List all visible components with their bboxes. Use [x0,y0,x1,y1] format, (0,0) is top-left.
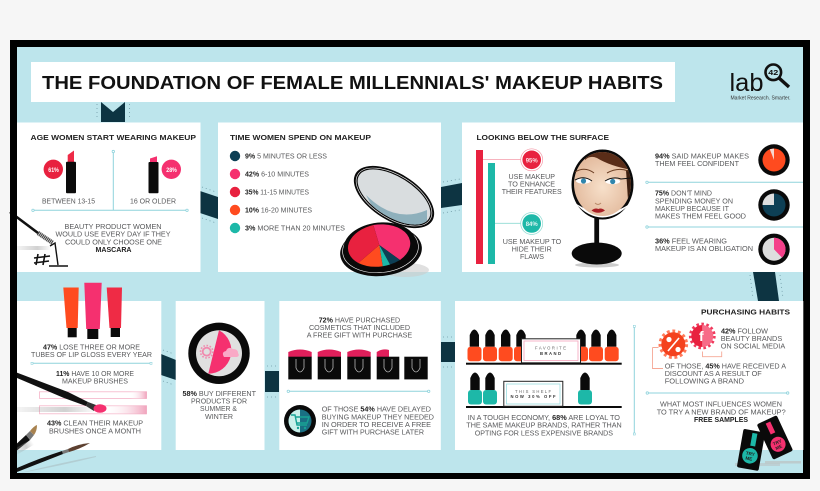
icon: try me sample cards [735,415,801,471]
icon: large pink makeup brush [10,370,106,413]
text block: free samples [657,400,786,424]
badge: 95% [521,149,543,171]
text block: social media: ON SOCIAL MEDIA [721,342,786,351]
badge: 84% [521,212,543,234]
stat: 75% feel good: SPENDING MONEY ON [655,196,733,205]
stat: 94% confident: THEM FEEL CONFIDENT [655,159,739,168]
sign: favorite brand: FAVORITE [535,346,566,350]
badge: 95%: 95% [526,158,538,164]
bar: 95% [476,150,522,264]
card: teal try me: ME [745,456,753,462]
icon: lipstick 61%: 61% [48,167,59,174]
text block: mascara: MASCARA [96,245,132,254]
heading: purchasing habits: PURCHASING HABITS [701,308,790,316]
connector: time to surface panel [441,179,462,213]
panel: seasons [176,301,264,450]
text block: social media: BEAUTY BRANDS [721,334,782,343]
text block: loyalty: IN A TOUGH ECONOMY, 68% ARE LOYAL TO [468,413,620,422]
text block: social media [721,326,786,351]
text block: hide flaws: HIDE THEIR [512,245,552,254]
icon: eyeshadow circle [188,323,250,384]
card: pink try me: ME [775,444,783,451]
text block: enhance: THEIR FEATURES [502,187,562,196]
icon: small tan brush [10,425,37,456]
legend: 9%: 9% 5 MINUTES OR LESS [245,152,327,160]
text block: delayed buying: OF THOSE 54% HAVE DELAYED [322,405,431,414]
title banner [31,62,675,102]
stat: 75% feel good: 75% DON'T MIND [655,189,712,198]
text block: loyalty [466,413,622,437]
icon: mirror with face [572,150,634,268]
text block: seasons: 58% BUY DIFFERENT [182,389,256,398]
connector: surface to purchasing panel [750,272,783,301]
stat: 94% confident: 94% SAID MAKEUP MAKES [655,152,749,161]
heading: age: AGE WOMEN START WEARING MAKEUP [30,133,196,142]
icon: lipstick 28%: 28% [166,167,177,174]
text block: mascara [56,222,170,254]
text block: mascara: COULD ONLY CHOOSE ONE [65,237,162,246]
text block: free samples: TO TRY A NEW BRAND OF MAKEUP? [657,407,786,416]
text block: cleaning: 43% CLEAN THEIR MAKEUP [47,419,143,428]
text block: hide flaws [503,237,561,261]
connector: seasons to gifts panel [265,366,279,397]
text block: enhance: TO ENHANCE [508,180,555,189]
icon: shopping bags [288,349,428,379]
connector: title to age panel [97,102,130,122]
legend: 10% [230,205,312,215]
panel: brands and purchasing habits [455,301,803,450]
icon: orange polish shelf [466,330,622,365]
legend: 3%: 3% MORE THAN 20 MINUTES [245,224,345,232]
text block: loyalty: THE SAME MAKEUP BRANDS, RATHER THAN [466,421,622,430]
panel: time women spend on makeup [218,122,441,272]
text block: enhance: USE MAKEUP [508,172,555,181]
icon: compact pie chart [340,166,434,277]
panel: age women start wearing makeup [17,122,200,272]
stat: 36% obligation: MAKEUP IS AN OBLIGATION [655,244,753,253]
text block: enhance [502,172,562,196]
legend: 42% [230,169,309,179]
text block: discount: OF THOSE, 45% HAVE RECEIVED A [665,361,787,370]
icon: shopping cart circle [284,405,316,437]
legend: 35%: 35% 11-15 MINUTES [245,188,309,196]
text block: hide flaws: FLAWS [520,252,544,261]
sign: favorite brand: BRAND [540,351,561,356]
panel: looking below the surface [462,122,803,272]
connector: gifts to brands panel [441,337,455,367]
legend: 35% [230,187,309,197]
divider: vertical [633,325,635,435]
text block: social media: 42% FOLLOW [721,326,769,335]
connector: lip gloss to seasons panel [161,350,176,385]
card: pink try me [757,415,793,460]
icon: lab42 logo: 42 [768,68,778,77]
divider: lip gloss [31,362,152,364]
text block: seasons: SUMMER & [200,404,237,413]
stat: 75% feel good: MAKES THEM FEEL GOOD [655,212,746,221]
text block: seasons: WINTER [205,412,233,421]
text block: discount: FOLLOWING A BRAND [665,377,744,386]
heading: time: TIME WOMEN SPEND ON MAKEUP [230,133,371,142]
text block: loyalty: OPTING FOR LESS EXPENSIVE BRANDS [475,428,613,437]
icon: flat dark brush [10,443,96,475]
icon: lipstick 28% [148,156,181,193]
text block: discount: DISCOUNT AS A RESULT OF [665,369,762,378]
text block: delayed buying: GIFT WITH PURCHASE LATER [322,428,424,437]
stat: 75% feel good [655,189,790,221]
sign: this shelf now 30% off: NOW 30% OFF [510,394,556,399]
legend: 10%: 10% 16-20 MINUTES [245,206,312,214]
text block: cleaning: BRUSHES ONCE A MONTH [49,426,141,435]
sign: this shelf now 30% off [504,381,563,406]
stat: 36% obligation: 36% FEEL WEARING [655,236,727,245]
card: teal try me: TRY [745,451,755,457]
text block: free gift: 72% HAVE PURCHASED [319,315,401,324]
stat: 36% obligation [655,234,790,265]
legend: 42%: 42% 6-10 MINUTES [245,170,309,178]
icon: lab42 logo: lab [730,69,764,97]
text block: hide flaws: USE MAKEUP TO [503,237,561,246]
icon: teal polish shelf [466,372,622,408]
divider: purchasing [646,392,789,394]
text block: lip gloss: TUBES OF LIP GLOSS EVERY YEAR [31,350,152,359]
label: 16 or older: 16 OR OLDER [130,196,176,206]
bar: 84% [488,163,522,264]
icon: mascara wand [10,212,68,266]
text block: mascara: BEAUTY PRODUCT WOMEN [64,222,162,231]
card: pink try me: TRY [772,438,782,447]
divider: gifts [287,390,430,392]
divider: surface 1 [646,181,803,184]
text block: delayed buying: IN ORDER TO RECEIVE A FREE [322,420,431,429]
heading: surface: LOOKING BELOW THE SURFACE [476,133,609,142]
text block: free gift: COSMETICS THAT INCLUDED [309,323,410,332]
icon: lab42 logo [730,64,790,102]
title banner: THE FOUNDATION OF FEMALE MILLENNIALS' MAKEUP HABITS [42,72,663,93]
panel: free gifts [279,301,441,450]
text block: delayed buying: BUYING MAKEUP THEY NEEDED [322,412,434,421]
divider: surface 2 [646,226,803,228]
sign: favorite brand [522,339,580,363]
text block: brushes [56,369,134,386]
icon: brush strokes [17,391,147,414]
text block: lip gloss: 47% LOSE THREE OR MORE [43,342,140,351]
icon: facebook badge [690,324,722,357]
label: between 13-15: BETWEEN 13-15 [42,196,95,206]
text block: delayed buying [322,405,434,437]
text block: lip gloss [31,342,152,359]
sign: this shelf now 30% off: THIS SHELF [515,389,551,394]
badge: 84%: 84% [526,221,538,228]
connector: age to time panel [200,187,218,223]
icon: facebook badge: f [699,328,704,344]
stat: 75% feel good: MAKEUP BECAUSE IT [655,204,729,213]
text block: seasons [182,389,256,421]
text block: cleaning [47,419,143,435]
text block: mascara: WOULD USE EVERY DAY IF THEY [56,230,170,239]
text block: free samples: FREE SAMPLES [694,415,748,424]
text block: free gift [307,315,412,340]
text block: brushes: 11% HAVE 10 OR MORE [56,369,134,378]
divider lines [32,150,188,212]
text block: free samples: WHAT MOST INFLUENCES WOMEN [660,400,782,409]
icon: lab42 logo: Market Research. Smarter. [730,96,790,102]
text block: seasons: PRODUCTS FOR [191,397,247,406]
text block: free gift: A FREE GIFT WITH PURCHASE [307,331,412,340]
icon: lipstick 61% [44,150,76,193]
icon: discount badge [652,331,686,368]
legend: 9% [230,151,327,161]
stat: 94% confident [655,144,790,176]
text block: discount [665,361,787,386]
icon: lip gloss tubes [63,283,122,339]
card: teal try me [737,429,765,471]
text block: brushes: MAKEUP BRUSHES [62,377,128,386]
panel: lip gloss and brushes [17,283,161,450]
